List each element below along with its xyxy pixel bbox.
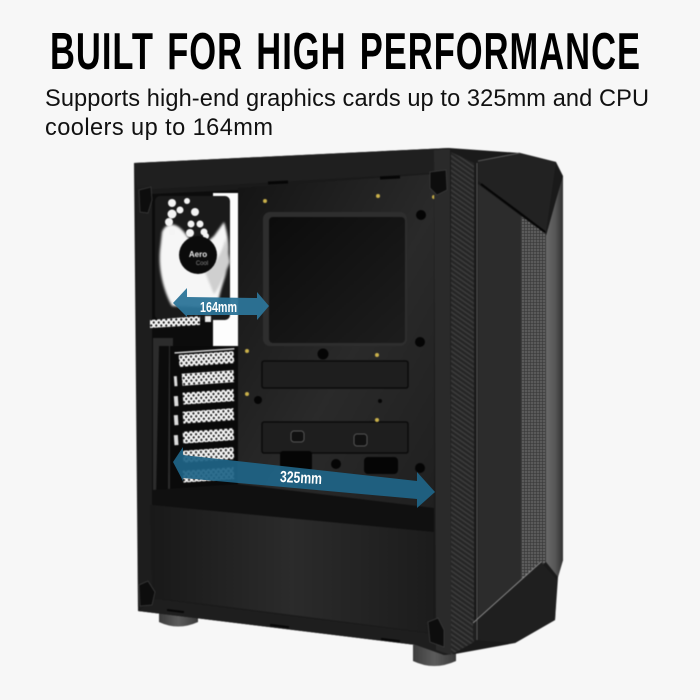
fan blades bbox=[160, 222, 230, 308]
rear bracket rail bbox=[153, 338, 173, 500]
rear fan bbox=[155, 196, 230, 320]
subtitle: Supports high-end graphics cards up to 325mm and CPU bbox=[45, 86, 649, 112]
fan hub logo bbox=[179, 236, 217, 274]
left frame column bbox=[137, 186, 152, 611]
white vent strip below fan bbox=[150, 316, 211, 328]
rear compartment bbox=[152, 190, 238, 500]
cable routing holes bbox=[254, 210, 426, 474]
brass standoffs bbox=[141, 194, 436, 630]
corner brackets bbox=[139, 170, 447, 647]
side face lower panel bbox=[473, 184, 521, 623]
white cutout behind rear panel bbox=[213, 193, 238, 347]
CPU cutout bbox=[263, 212, 407, 346]
side face upper panel bbox=[478, 153, 556, 232]
upper diagonal crease bbox=[481, 184, 545, 232]
lower front corner bbox=[473, 562, 557, 643]
motherboard tray bbox=[238, 174, 434, 520]
shelf above shroud bbox=[152, 484, 434, 532]
front right frame column bbox=[434, 149, 451, 655]
bottom rail slots bbox=[167, 609, 400, 642]
top rail slots bbox=[268, 175, 400, 185]
fan hub logo: Cool bbox=[196, 261, 208, 267]
chrome bevel lines bbox=[473, 153, 541, 640]
case feet bbox=[159, 610, 456, 666]
light front edge bbox=[546, 176, 563, 577]
honeycomb highlights on fan bbox=[165, 198, 209, 239]
fan hub logo: Aero bbox=[189, 250, 207, 259]
expansion slot covers bbox=[170, 346, 238, 494]
bottom frame rail bbox=[138, 599, 446, 655]
power supply shroud bbox=[150, 505, 433, 633]
arrow: 325mm clearance bbox=[173, 447, 435, 508]
embossed tray panels bbox=[262, 361, 408, 453]
subtitle: coolers up to 164mm bbox=[45, 115, 273, 141]
carbon side strip bbox=[451, 152, 474, 655]
arrow: 164mm clearance bbox=[173, 288, 269, 320]
top rail bbox=[134, 148, 449, 190]
label 325mm: 325mm bbox=[280, 469, 322, 488]
front mesh bbox=[521, 216, 546, 584]
case body silhouette bbox=[134, 148, 563, 655]
PC case bbox=[134, 148, 563, 666]
label 164mm: 164mm bbox=[200, 299, 237, 316]
